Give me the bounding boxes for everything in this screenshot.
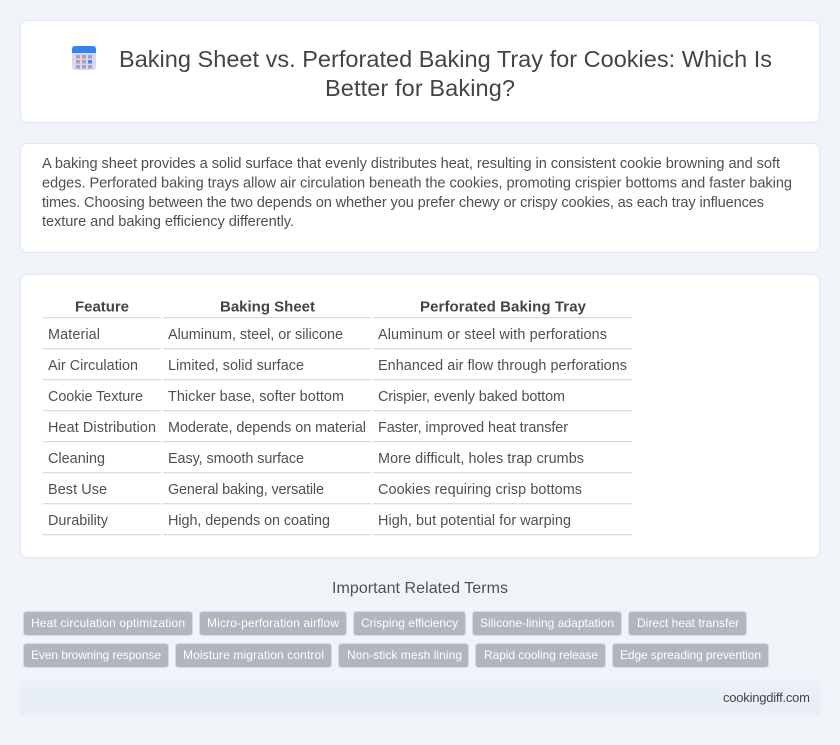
row: best use: General baking, versatile bbox=[168, 482, 324, 498]
row: cleaning: Cleaning bbox=[48, 451, 105, 467]
tag: heat circulation optimization: Heat circulation optimization bbox=[31, 616, 185, 630]
row: air circulation: Limited, solid surface bbox=[168, 358, 304, 374]
row: cookie texture: Crispier, evenly baked bottom bbox=[378, 389, 565, 405]
table header: Baking Sheet bbox=[220, 298, 315, 316]
row: cookie texture: Cookie Texture bbox=[48, 389, 143, 405]
row: air circulation: Air Circulation bbox=[48, 358, 138, 374]
footer source text: cookingdiff.com bbox=[723, 690, 810, 705]
tag: moisture migration control bbox=[176, 644, 332, 668]
title bbox=[119, 46, 772, 101]
row: best use bbox=[48, 482, 582, 498]
description text: times. Choosing between the two depends on whether you prefer chewy or crispy cookies, as each tray influences bbox=[42, 195, 764, 211]
row: durability: Durability bbox=[48, 513, 109, 529]
description text: edges. Perforated baking trays allow air circulation beneath the cookies, promoting crispier bottoms and faster baking bbox=[42, 176, 792, 192]
description text bbox=[42, 156, 792, 230]
comparison table panel bbox=[20, 274, 820, 558]
description panel bbox=[20, 144, 820, 252]
row: material: Aluminum or steel with perforations bbox=[378, 327, 607, 343]
row: cleaning: Easy, smooth surface bbox=[168, 451, 304, 467]
tag: non-stick mesh lining bbox=[338, 644, 468, 668]
row: best use: Cookies requiring crisp bottoms bbox=[378, 482, 582, 498]
row: cookie texture bbox=[48, 389, 565, 405]
tag: micro-perforation airflow: Micro-perforation airflow bbox=[207, 616, 339, 630]
row: heat distribution: Faster, improved heat transfer bbox=[378, 420, 568, 436]
row: durability bbox=[48, 513, 571, 529]
footer bbox=[20, 681, 820, 715]
tag: non-stick mesh lining: Non-stick mesh lining bbox=[347, 648, 462, 662]
related terms tags bbox=[24, 612, 768, 668]
row: heat distribution: Moderate, depends on material bbox=[168, 420, 366, 436]
row: material: Material bbox=[48, 327, 100, 343]
tag: direct heat transfer bbox=[628, 612, 746, 636]
title: Better for Baking? bbox=[325, 75, 515, 101]
tag: silicone-lining adaptation bbox=[472, 612, 622, 636]
row: cookie texture: Thicker base, softer bottom bbox=[168, 389, 344, 405]
tag: direct heat transfer: Direct heat transfer bbox=[637, 616, 739, 630]
description text: A baking sheet provides a solid surface that evenly distributes heat, resulting in consistent cookie browning and soft bbox=[42, 156, 780, 172]
row: durability: High, but potential for warping bbox=[378, 513, 571, 529]
tag: silicone-lining adaptation: Silicone-lining adaptation bbox=[480, 616, 614, 630]
tag: edge spreading prevention: Edge spreading prevention bbox=[620, 648, 761, 662]
icon: calendar bbox=[72, 46, 96, 70]
row: heat distribution bbox=[48, 420, 568, 436]
title: Baking Sheet vs. Perforated Baking Tray for Cookies: Which Is bbox=[119, 46, 772, 72]
tag: micro-perforation airflow bbox=[200, 612, 346, 636]
tag: edge spreading prevention bbox=[612, 644, 768, 668]
tag: crisping efficiency bbox=[354, 612, 466, 636]
tag: rapid cooling release bbox=[476, 644, 606, 668]
tag: heat circulation optimization bbox=[24, 612, 192, 636]
tag: even browning response bbox=[24, 644, 168, 668]
row: cleaning: More difficult, holes trap crumbs bbox=[378, 451, 584, 467]
related terms heading: Important Related Terms bbox=[332, 580, 508, 597]
table header: Feature bbox=[75, 298, 129, 316]
tag: even browning response: Even browning response bbox=[31, 648, 161, 662]
row: heat distribution: Heat Distribution bbox=[48, 420, 156, 436]
row: durability: High, depends on coating bbox=[168, 513, 330, 529]
row: air circulation: Enhanced air flow through perforations bbox=[378, 358, 627, 374]
tag: crisping efficiency: Crisping efficiency bbox=[361, 616, 458, 630]
row: best use: Best Use bbox=[48, 482, 107, 498]
table row lines bbox=[43, 317, 632, 535]
tag: moisture migration control: Moisture migration control bbox=[183, 648, 324, 662]
row: material: Aluminum, steel, or silicone bbox=[168, 327, 343, 343]
row: air circulation bbox=[48, 358, 627, 374]
table header: Perforated Baking Tray bbox=[420, 298, 587, 316]
table header bbox=[75, 298, 587, 316]
description text: texture and baking efficiency differently. bbox=[42, 214, 294, 230]
header panel bbox=[20, 20, 820, 122]
row: cleaning bbox=[48, 451, 584, 467]
tag: rapid cooling release: Rapid cooling release bbox=[484, 648, 598, 662]
row: material bbox=[48, 327, 607, 343]
